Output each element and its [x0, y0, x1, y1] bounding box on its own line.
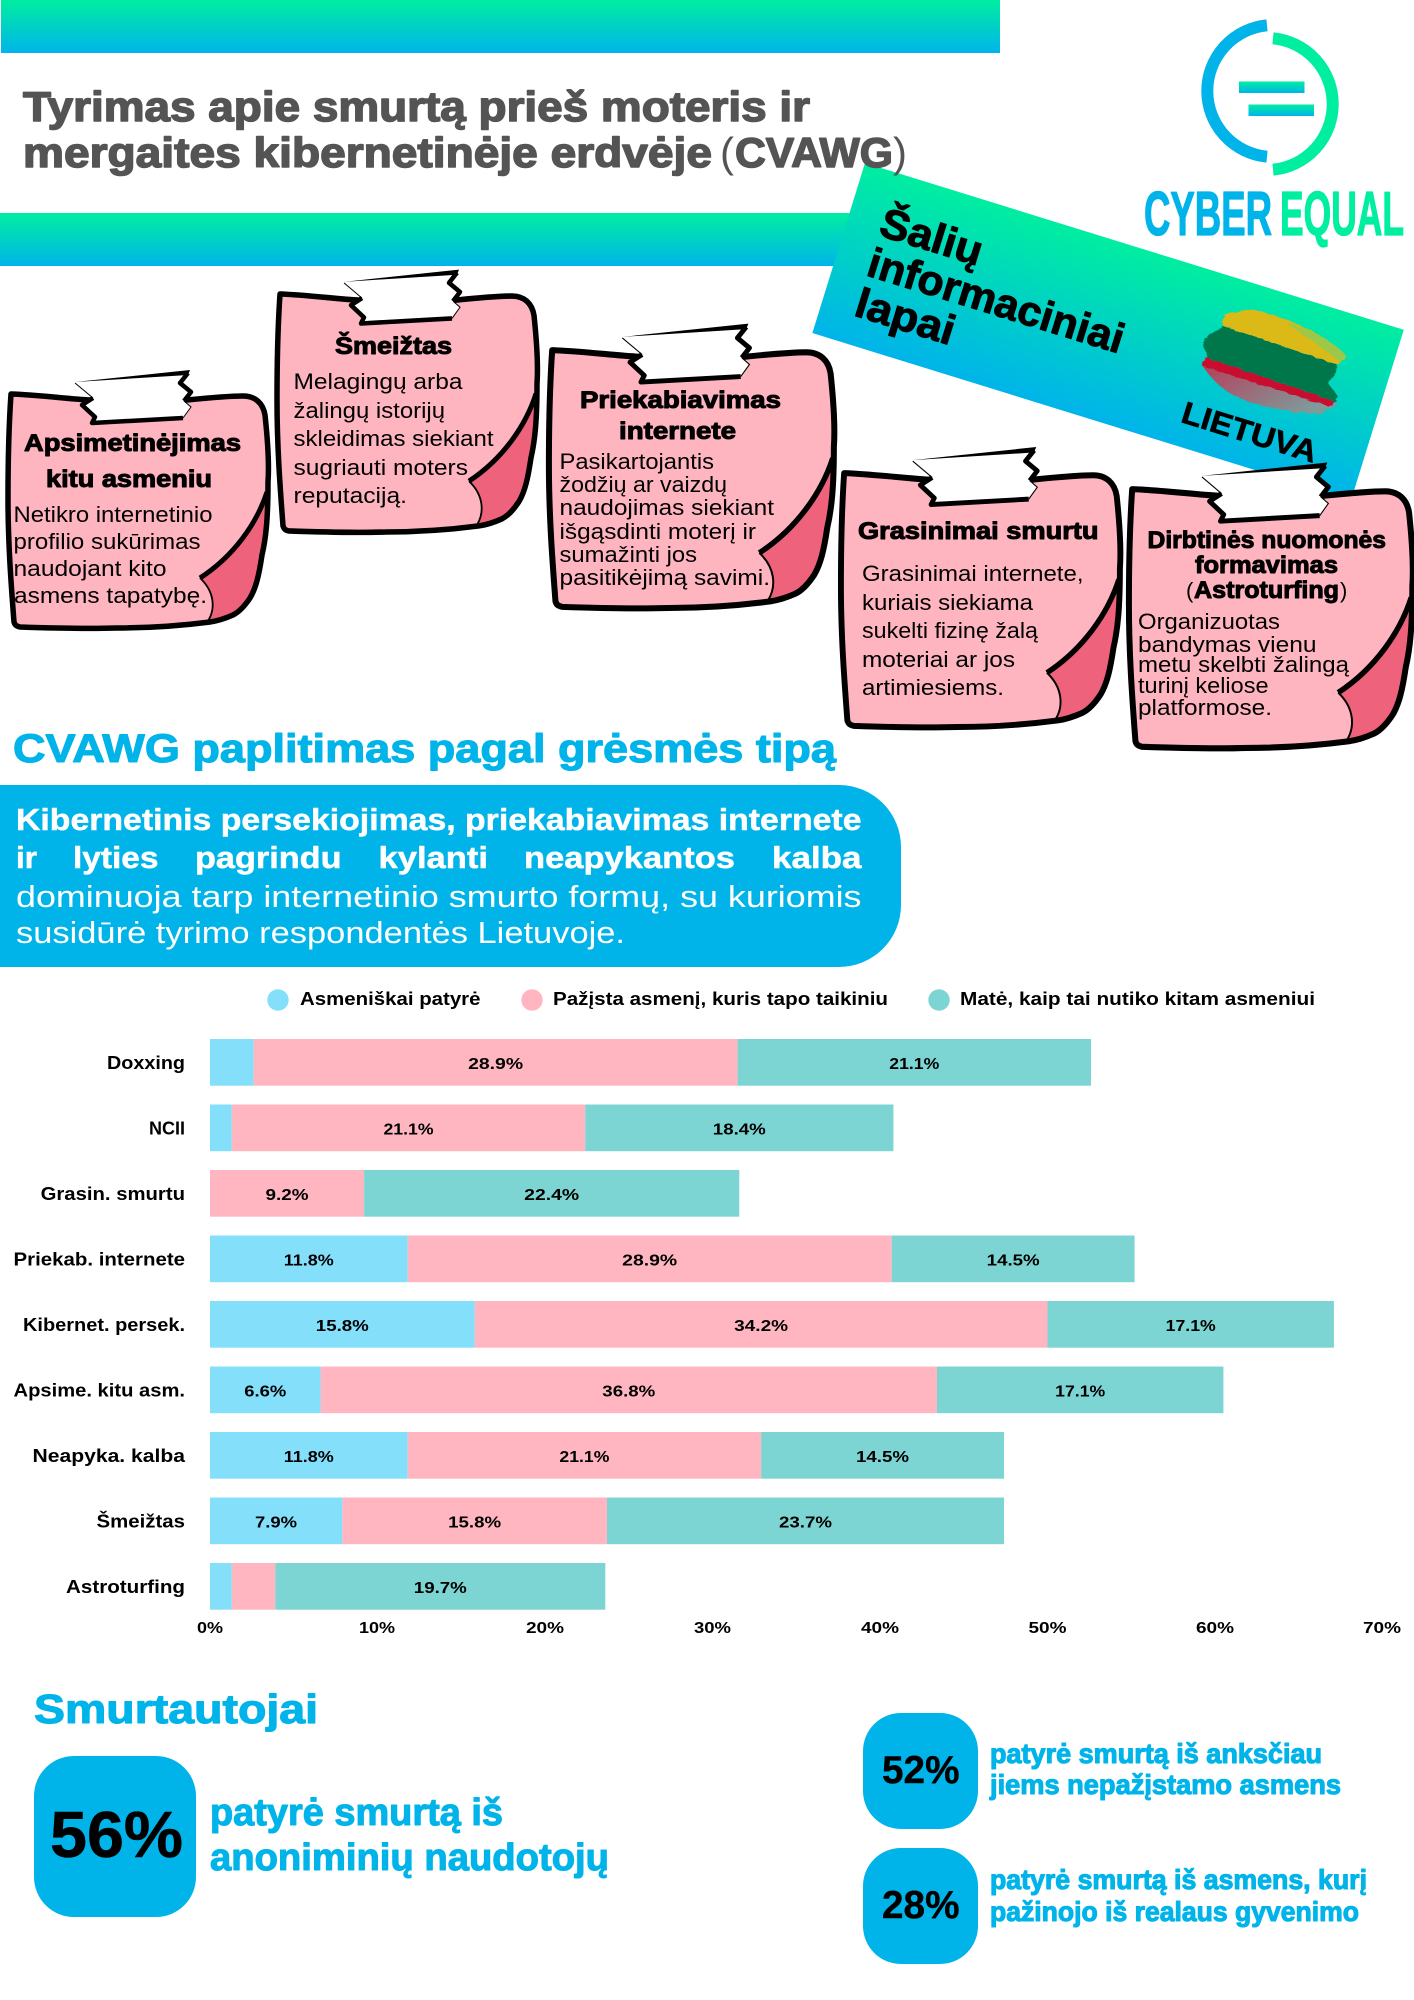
stat: 56% — [34, 1756, 609, 1917]
row: Astroturfing — [66, 1563, 605, 1610]
row: Astroturfing: 19.7% — [414, 1580, 467, 1597]
top gradient bar — [1, 0, 1000, 53]
row: Priekab. internete: 11.8% — [284, 1252, 334, 1270]
callout regular text: dominuoja tarp internetinio smurto formų, su kuriomis — [16, 879, 862, 914]
stat description: jiems nepažįstamo asmens — [989, 1769, 1341, 1800]
note body: sumažinti jos — [560, 542, 697, 567]
note body: Grasinimai internete, — [862, 561, 1084, 586]
panel: Šmeižtas — [277, 270, 537, 532]
panel: Apsimetinėjimas kitu asmeniu — [8, 370, 268, 628]
stat: 52%: 52% — [882, 1749, 960, 1792]
note body: kuriais siekiama — [862, 590, 1034, 615]
row: Doxxing — [107, 1039, 1091, 1086]
logo: CyberEqual: CYBER — [1144, 180, 1272, 249]
note body: bandymas vienu — [1138, 632, 1316, 657]
row: Kibernet. persek.: 17.1% — [1166, 1318, 1216, 1335]
x axis labels: 10% — [359, 1620, 395, 1637]
row: Doxxing: 28.9% — [468, 1056, 523, 1073]
note body: pasitikėjimą savimi. — [560, 565, 770, 590]
stat description: patyrė smurtą iš anksčiau — [990, 1738, 1322, 1769]
banner heading: Šalių — [875, 198, 989, 274]
section heading: prevalence: CVAWG paplitimas pagal grėsmės tipą — [13, 727, 837, 771]
note body: metu skelbti žalingą — [1138, 652, 1350, 677]
x axis labels: 50% — [1028, 1620, 1066, 1637]
callout bold line 1: Kibernetinis persekiojimas, priekabiavimas internete — [16, 802, 862, 837]
row: Priekab. internete: Priekab. internete — [14, 1250, 185, 1270]
row: Kibernet. persek. — [23, 1301, 1334, 1348]
banner heading: lapai — [850, 279, 961, 354]
note heading: Apsimetinėjimas — [24, 430, 241, 457]
title: CVAWG — [735, 129, 893, 176]
stat description: patyrė smurtą iš asmens, kurį — [990, 1864, 1367, 1895]
note heading — [580, 387, 781, 445]
callout regular text — [16, 879, 862, 950]
note body: asmens tapatybę. — [14, 583, 207, 608]
x axis labels: 20% — [526, 1620, 564, 1637]
row: Apsime. kitu asm. — [14, 1366, 1223, 1413]
note body — [862, 561, 1084, 700]
row: Neapyka. kalba: 14.5% — [856, 1449, 909, 1466]
row: Apsime. kitu asm.: 17.1% — [1055, 1384, 1105, 1400]
row: Apsime. kitu asm.: 6.6% — [244, 1384, 286, 1400]
second gradient bar — [0, 213, 860, 266]
row: NCII: NCII — [149, 1118, 185, 1138]
row: Priekab. internete — [14, 1236, 1135, 1282]
legend — [267, 989, 1315, 1011]
note heading: formavimas — [1195, 552, 1338, 579]
callout bold line 2: kalba — [772, 840, 862, 875]
note heading: Astroturfing — [1194, 577, 1339, 604]
bar chart: prevalence by threat type — [14, 1039, 1401, 1637]
row: Grasin. smurtu: 9.2% — [266, 1187, 308, 1204]
note body: artimiesiems. — [862, 675, 1004, 700]
callout bold line 2: lyties — [73, 840, 158, 875]
callout bold line 2: ir — [16, 840, 37, 875]
row: Neapyka. kalba — [32, 1432, 1004, 1479]
banner heading — [850, 198, 1143, 402]
country label: LIETUVA — [1178, 395, 1322, 470]
note body: sukelti fizinę žalą — [862, 618, 1039, 643]
icon: Lithuanian flag brush strokes — [1202, 310, 1347, 414]
banner heading: informaciniai — [862, 239, 1130, 362]
note body — [1138, 609, 1350, 720]
stat description: anoniminių naudotojų — [210, 1837, 609, 1879]
callout regular text: susidūrė tyrimo respondentės Lietuvoje. — [16, 915, 625, 950]
x axis labels: 40% — [861, 1620, 899, 1637]
title: mergaites kibernetinėje erdvėje — [23, 129, 712, 176]
note body — [14, 502, 212, 608]
row: Neapyka. kalba: Neapyka. kalba — [32, 1446, 186, 1466]
note body: Pasikartojantis — [560, 449, 714, 474]
row: NCII: 21.1% — [384, 1122, 434, 1138]
x axis labels: 70% — [1363, 1620, 1401, 1637]
callout: key finding — [0, 785, 901, 967]
row: Šmeižtas: 23.7% — [779, 1514, 832, 1532]
row: Apsime. kitu asm.: Apsime. kitu asm. — [14, 1380, 185, 1400]
note body: Melagingų arba — [294, 369, 463, 394]
note heading: kitu asmeniu — [46, 466, 212, 493]
note heading: Grasinimai smurtu — [858, 518, 1098, 545]
note heading — [1148, 527, 1386, 604]
row: Grasin. smurtu: 22.4% — [524, 1187, 579, 1204]
panel: Priekabiavimas internete — [549, 324, 834, 608]
stat: 56%: 56% — [50, 1798, 183, 1871]
stat: 28% — [863, 1848, 1367, 1964]
x axis labels: 0% — [197, 1620, 223, 1637]
title: ( — [720, 129, 734, 176]
row: NCII — [149, 1104, 893, 1151]
callout bold line 2 — [16, 840, 862, 875]
stat description — [990, 1864, 1367, 1927]
stat description: pažinojo iš realaus gyvenimo — [990, 1896, 1359, 1927]
row: Šmeižtas: 7.9% — [255, 1514, 297, 1532]
note body: skleidimas siekiant — [294, 426, 494, 451]
note body: sugriauti moters — [294, 455, 468, 480]
note heading: ) — [1340, 578, 1347, 603]
x axis labels — [197, 1620, 1401, 1637]
note body: naudojimas siekiant — [560, 495, 774, 520]
note body: išgąsdinti moterį ir — [560, 519, 756, 544]
callout bold line 2: neapykantos — [524, 840, 735, 875]
x axis labels: 60% — [1196, 1620, 1234, 1637]
note body: moteriai ar jos — [862, 647, 1015, 672]
legend: Matė, kaip tai nutiko kitam asmeniui — [960, 989, 1315, 1009]
row: Neapyka. kalba: 11.8% — [284, 1449, 334, 1466]
legend: Asmeniškai patyrė — [300, 989, 480, 1009]
title: ) — [893, 129, 907, 176]
stat description — [210, 1792, 609, 1879]
legend: Pažįsta asmenį, kuris tapo taikiniu — [553, 989, 888, 1009]
callout bold line 2: kylanti — [378, 840, 488, 875]
section heading: perpetrators: Smurtautojai — [34, 1686, 318, 1732]
callout bold line 2: pagrindu — [195, 840, 342, 875]
panel: Grasinimai smurtu — [841, 447, 1120, 727]
note body: žalingų istorijų — [294, 398, 445, 423]
note heading: Priekabiavimas — [580, 387, 781, 414]
panel: Dirbtinės nuomonės formavimas — [1129, 463, 1413, 748]
banner: country fact sheets — [812, 163, 1404, 500]
row: NCII: 18.4% — [713, 1122, 766, 1138]
note body: turinį keliose — [1138, 673, 1268, 698]
note body: Organizuotas — [1138, 609, 1280, 634]
title: Tyrimas apie smurtą prieš moteris ir — [23, 83, 810, 130]
stat: 52% — [863, 1713, 1341, 1829]
x axis labels: 30% — [694, 1620, 731, 1637]
note body: Netikro internetinio — [14, 502, 212, 527]
note heading: internete — [619, 418, 736, 445]
note heading: Šmeižtas — [335, 332, 452, 360]
note body: žodžių ar vaizdų — [560, 472, 727, 497]
row: Kibernet. persek.: 34.2% — [734, 1318, 788, 1335]
stat: 28%: 28% — [882, 1884, 960, 1927]
note body: platformose. — [1138, 695, 1272, 720]
row: Grasin. smurtu — [41, 1170, 739, 1217]
note body: profilio sukūrimas — [14, 529, 200, 554]
row: Neapyka. kalba: 21.1% — [559, 1449, 609, 1466]
row: Šmeižtas — [96, 1498, 1004, 1544]
note body: reputaciją. — [294, 483, 407, 508]
row: Kibernet. persek.: 15.8% — [316, 1318, 369, 1335]
stat description: patyrė smurtą iš — [210, 1792, 503, 1834]
row: Priekab. internete: 14.5% — [987, 1252, 1040, 1270]
row: Šmeižtas: 15.8% — [448, 1514, 501, 1532]
note heading: Dirbtinės nuomonės — [1148, 527, 1386, 554]
row: Doxxing: Doxxing — [107, 1053, 185, 1073]
row: Astroturfing: Astroturfing — [66, 1577, 185, 1597]
row: Kibernet. persek.: Kibernet. persek. — [23, 1315, 185, 1335]
row: Apsime. kitu asm.: 36.8% — [602, 1384, 655, 1400]
logo: CyberEqual — [1144, 25, 1404, 249]
row: Šmeižtas: Šmeižtas — [96, 1510, 185, 1532]
note body: naudojant kito — [14, 556, 166, 581]
note heading — [24, 430, 241, 493]
note heading: ( — [1186, 578, 1194, 603]
row: Priekab. internete: 28.9% — [622, 1252, 677, 1270]
row: Grasin. smurtu: Grasin. smurtu — [41, 1184, 185, 1204]
row: Doxxing: 21.1% — [889, 1056, 939, 1073]
title — [23, 83, 907, 176]
note body — [294, 369, 494, 508]
note body — [560, 449, 774, 590]
stat description — [989, 1738, 1341, 1800]
